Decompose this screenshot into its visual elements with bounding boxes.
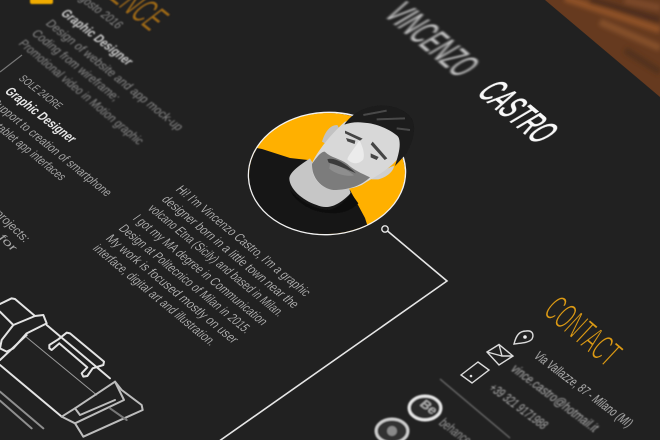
- suitcase body: [0, 325, 110, 417]
- moustache: [327, 159, 356, 173]
- name: [375, 0, 567, 149]
- right ear: [371, 166, 394, 179]
- job two date: SOLE 24ORE: [16, 74, 65, 111]
- hair highlights: [363, 111, 410, 130]
- wood table corner: [540, 0, 660, 100]
- face: [312, 120, 402, 190]
- icon: dribbble badge: [376, 419, 408, 440]
- job two: [0, 74, 116, 254]
- bio paragraph: [90, 183, 315, 348]
- job one line one: Design of website and app mock-up: [43, 17, 187, 133]
- job two title: Graphic Designer: [2, 84, 81, 145]
- connector line: [215, 226, 447, 440]
- neck: [289, 158, 351, 207]
- left eye and brow: [345, 131, 363, 144]
- icon: phone: [461, 362, 489, 383]
- portrait figure: [289, 105, 414, 213]
- experience heading: [30, 0, 177, 37]
- collar shadow: [290, 190, 358, 213]
- suitcase handle: [49, 333, 104, 377]
- bio line 2: designer born in a little town near the: [159, 193, 303, 310]
- contact divider: [440, 379, 510, 438]
- suitcase base: [0, 392, 43, 428]
- bio line 3: volcano Etna (Sicily) and based in Milan.: [145, 202, 288, 319]
- left ear: [322, 125, 340, 143]
- icon: behance badge: Be: [417, 397, 441, 417]
- bio line 5: Design at Politecnico of Milan in 2015.: [116, 222, 255, 336]
- bio line 4: I got my MA degree in Communication: [130, 212, 272, 328]
- connector node: [382, 226, 388, 232]
- hair: [344, 105, 414, 166]
- portrait: [240, 105, 414, 240]
- portrait ring: [245, 108, 409, 239]
- icon: map pin: [514, 331, 533, 344]
- yellow fill: [249, 113, 405, 234]
- icon: envelope: [487, 344, 513, 365]
- lips: [329, 164, 354, 176]
- social links: [376, 396, 488, 440]
- portrait disc: [240, 113, 405, 240]
- bio line 7: interface, digital art and illustration.: [90, 242, 220, 348]
- heading marker: [30, 0, 53, 4]
- nose: [347, 140, 364, 163]
- last name: CASTRO: [468, 75, 567, 149]
- bio line 6: My work is focused mostly on user: [103, 232, 243, 346]
- connector path: [215, 231, 447, 440]
- job one: [16, 0, 187, 147]
- beard: [312, 152, 370, 190]
- contact details: [486, 348, 637, 434]
- job one line two: Coding from wireframe;: [29, 27, 124, 103]
- icon: suitcase line art: [0, 298, 143, 437]
- sweater: [249, 148, 367, 234]
- bio line 1: Hi! I'm Vincenzo Castro, I'm a graphic: [173, 183, 315, 299]
- suitcase foot: [62, 382, 143, 437]
- job one line three: Promotional video in Motion graphic: [16, 37, 148, 147]
- job one title: Graphic Designer: [58, 6, 138, 68]
- suitcase top flap: [0, 298, 47, 352]
- first name: VINCENZO: [375, 0, 488, 83]
- job divider: [0, 55, 22, 72]
- contact icons: [461, 331, 533, 383]
- right eye and brow: [371, 142, 387, 160]
